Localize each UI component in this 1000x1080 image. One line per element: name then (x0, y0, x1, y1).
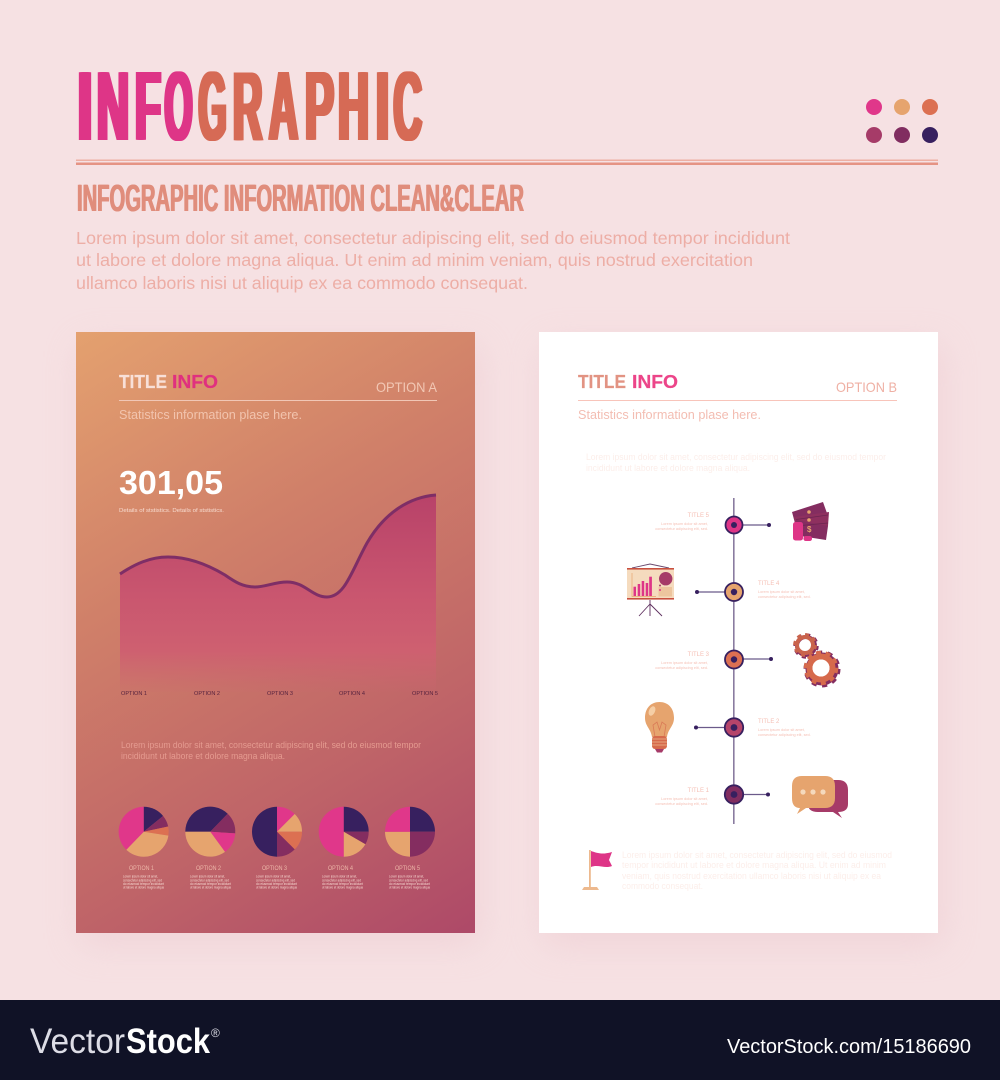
pie labels (129, 866, 421, 872)
chart axis labels: OPTION 4 (339, 691, 365, 697)
panel A body text (121, 740, 421, 761)
footer image id: VectorStock.com/15186690 (727, 1036, 971, 1058)
panel A body text: Lorem ipsum dolor sit amet, consectetur adipiscing elit, sed do eiusmod tempor (121, 740, 421, 750)
panel B intro text: Lorem ipsum dolor sit amet, consectetur adipiscing elit, sed do eiusmod tempor (586, 452, 886, 462)
panel B footer text: veniam, quis nostrud exercitation ullamco laboris nisi ut aliquip ex ea (622, 871, 882, 882)
pie descriptions: do eiusmod tempor incididunt (322, 882, 363, 886)
pie descriptions: consectetur adipiscing elit, sed (389, 878, 428, 882)
panel B option label: OPTION B (836, 379, 897, 395)
intro text: ullamco laboris nisi ut aliquip ex ea commodo consequat. (76, 273, 528, 293)
pie descriptions: ut labore et dolore magna aliqua (322, 886, 363, 890)
title: N (97, 51, 129, 161)
timeline text 5 (655, 513, 710, 531)
timeline text 5: TITLE 5 (688, 513, 710, 519)
timeline text 4: Lorem ipsum dolor sit amet, (758, 590, 805, 594)
title: I (376, 51, 390, 161)
statistic value: 301,05 (119, 464, 223, 501)
timeline text 1: TITLE 1 (688, 788, 710, 794)
pie descriptions: ut labore et dolore magna aliqua (256, 886, 297, 890)
pie descriptions: do eiusmod tempor incididunt (123, 882, 164, 886)
title: A (269, 51, 298, 161)
timeline (694, 498, 773, 824)
statistic caption: Details of ststistics. Details of ststistics. (119, 508, 225, 514)
panel B intro text: incididunt ut labore et dolore magna aliqua. (586, 463, 750, 473)
icon: presentation board (627, 564, 674, 616)
pie descriptions: Lorem ipsum dolor sit amet, (389, 874, 424, 878)
panel A subtitle: Statistics information plase here. (119, 407, 302, 422)
panel B footer text (622, 850, 892, 892)
pie descriptions: Lorem ipsum dolor sit amet, (190, 874, 225, 878)
panel: option A (76, 332, 475, 933)
pie descriptions (123, 874, 430, 890)
pie descriptions: ut labore et dolore magna aliqua (123, 886, 164, 890)
pie chart 2 (185, 807, 235, 857)
pie chart 5 (385, 807, 435, 857)
chart axis labels (121, 691, 438, 697)
area chart (120, 495, 438, 697)
panel: option B (539, 332, 938, 933)
title: R (233, 51, 262, 161)
pie descriptions: consectetur adipiscing elit, sed (256, 878, 295, 882)
footer logo: ® (211, 1026, 220, 1040)
pie labels: OPTION 3 (262, 866, 288, 872)
intro text: ut labore et dolore magna aliqua. Ut enim ad minim veniam, quis nostrud exercitation (76, 250, 753, 270)
pie descriptions: consectetur adipiscing elit, sed (123, 878, 162, 882)
panel A option label: OPTION A (376, 379, 438, 395)
chart axis labels: OPTION 2 (194, 691, 220, 697)
panel A heading: TITLE (119, 372, 167, 392)
timeline text 1: consectetur adipiscing elit, sed. (655, 802, 708, 806)
title: O (165, 51, 192, 161)
pie labels: OPTION 2 (196, 866, 222, 872)
title: I (77, 51, 93, 161)
pie descriptions: Lorem ipsum dolor sit amet, (322, 874, 357, 878)
timeline text 2: consectetur adipiscing elit, sed. (758, 733, 811, 737)
panel B footer text: commodo consequat. (622, 881, 703, 892)
chart axis labels: OPTION 3 (267, 691, 293, 697)
timeline text 1: Lorem ipsum dolor sit amet, (661, 797, 708, 801)
title: P (305, 51, 334, 161)
pie labels: OPTION 1 (129, 866, 155, 872)
timeline text 5: Lorem ipsum dolor sit amet, (661, 522, 708, 526)
title: F (135, 51, 161, 161)
footer bar (0, 1000, 1000, 1080)
pie descriptions: do eiusmod tempor incididunt (190, 882, 231, 886)
pie chart 1 (119, 807, 169, 857)
timeline text 1 (655, 788, 710, 806)
timeline text 3: TITLE 3 (688, 652, 710, 658)
timeline node 5 (726, 516, 742, 534)
pie descriptions: ut labore et dolore magna aliqua (190, 886, 231, 890)
panel B subtitle: Statistics information plase here. (578, 407, 761, 422)
panel A body text: incididunt ut labore et dolore magna aliqua. (121, 751, 285, 761)
pie chart 3 (252, 807, 302, 857)
timeline text 3: Lorem ipsum dolor sit amet, (661, 661, 708, 665)
palette dots (866, 99, 938, 143)
icon: light bulb (645, 702, 674, 752)
pie labels: OPTION 5 (395, 866, 421, 872)
timeline text 3 (655, 652, 710, 670)
timeline text 2: TITLE 2 (758, 719, 780, 725)
icon: money: $ (807, 525, 812, 534)
timeline text 2 (758, 719, 811, 737)
timeline text 5: consectetur adipiscing elit, sed. (655, 527, 708, 531)
pie descriptions: ut labore et dolore magna aliqua (389, 886, 430, 890)
pie descriptions: Lorem ipsum dolor sit amet, (123, 874, 158, 878)
title: H (338, 51, 369, 161)
title: G (199, 51, 226, 161)
icon: gears (794, 634, 838, 686)
icon: speech bubbles (792, 776, 848, 818)
pie descriptions: consectetur adipiscing elit, sed (190, 878, 229, 882)
timeline text 2: Lorem ipsum dolor sit amet, (758, 728, 805, 732)
pie descriptions: consectetur adipiscing elit, sed (322, 878, 361, 882)
timeline node 2 (725, 718, 743, 737)
subtitle: INFOGRAPHIC INFORMATION CLEAN&CLEAR (77, 178, 524, 220)
timeline node 1 (725, 785, 743, 804)
panel B footer text: tempor incididunt ut labore et dolore magna aliqua. Ut enim ad minim (622, 860, 886, 871)
timeline node 3 (725, 650, 743, 668)
intro text (76, 228, 790, 293)
timeline node 4 (725, 583, 743, 601)
chart axis labels: OPTION 5 (412, 691, 438, 697)
footer logo: Vector (30, 1022, 125, 1061)
timeline text 3: consectetur adipiscing elit, sed. (655, 666, 708, 670)
chart axis labels: OPTION 1 (121, 691, 147, 697)
pie descriptions: do eiusmod tempor incididunt (389, 882, 430, 886)
timeline text 4: TITLE 4 (758, 581, 780, 587)
panel B intro text (586, 452, 886, 473)
timeline text 4 (758, 581, 811, 599)
icon: flag (582, 850, 612, 890)
icon: money (792, 502, 829, 541)
panel A heading: INFO (172, 372, 218, 392)
pie labels: OPTION 4 (328, 866, 354, 872)
footer logo: Stock (126, 1022, 210, 1061)
text: C (394, 51, 422, 161)
panel B footer text: Lorem ipsum dolor sit amet, consectetur adipiscing elit, sed do eiusmod (622, 850, 892, 861)
pie chart 4 (319, 807, 369, 857)
timeline text 4: consectetur adipiscing elit, sed. (758, 595, 811, 599)
panel B heading: TITLE (578, 372, 626, 392)
pie descriptions: do eiusmod tempor incididunt (256, 882, 297, 886)
panel B heading: INFO (632, 372, 678, 392)
pie descriptions: Lorem ipsum dolor sit amet, (256, 874, 291, 878)
intro text: Lorem ipsum dolor sit amet, consectetur adipiscing elit, sed do eiusmod tempor incididunt (76, 228, 790, 248)
